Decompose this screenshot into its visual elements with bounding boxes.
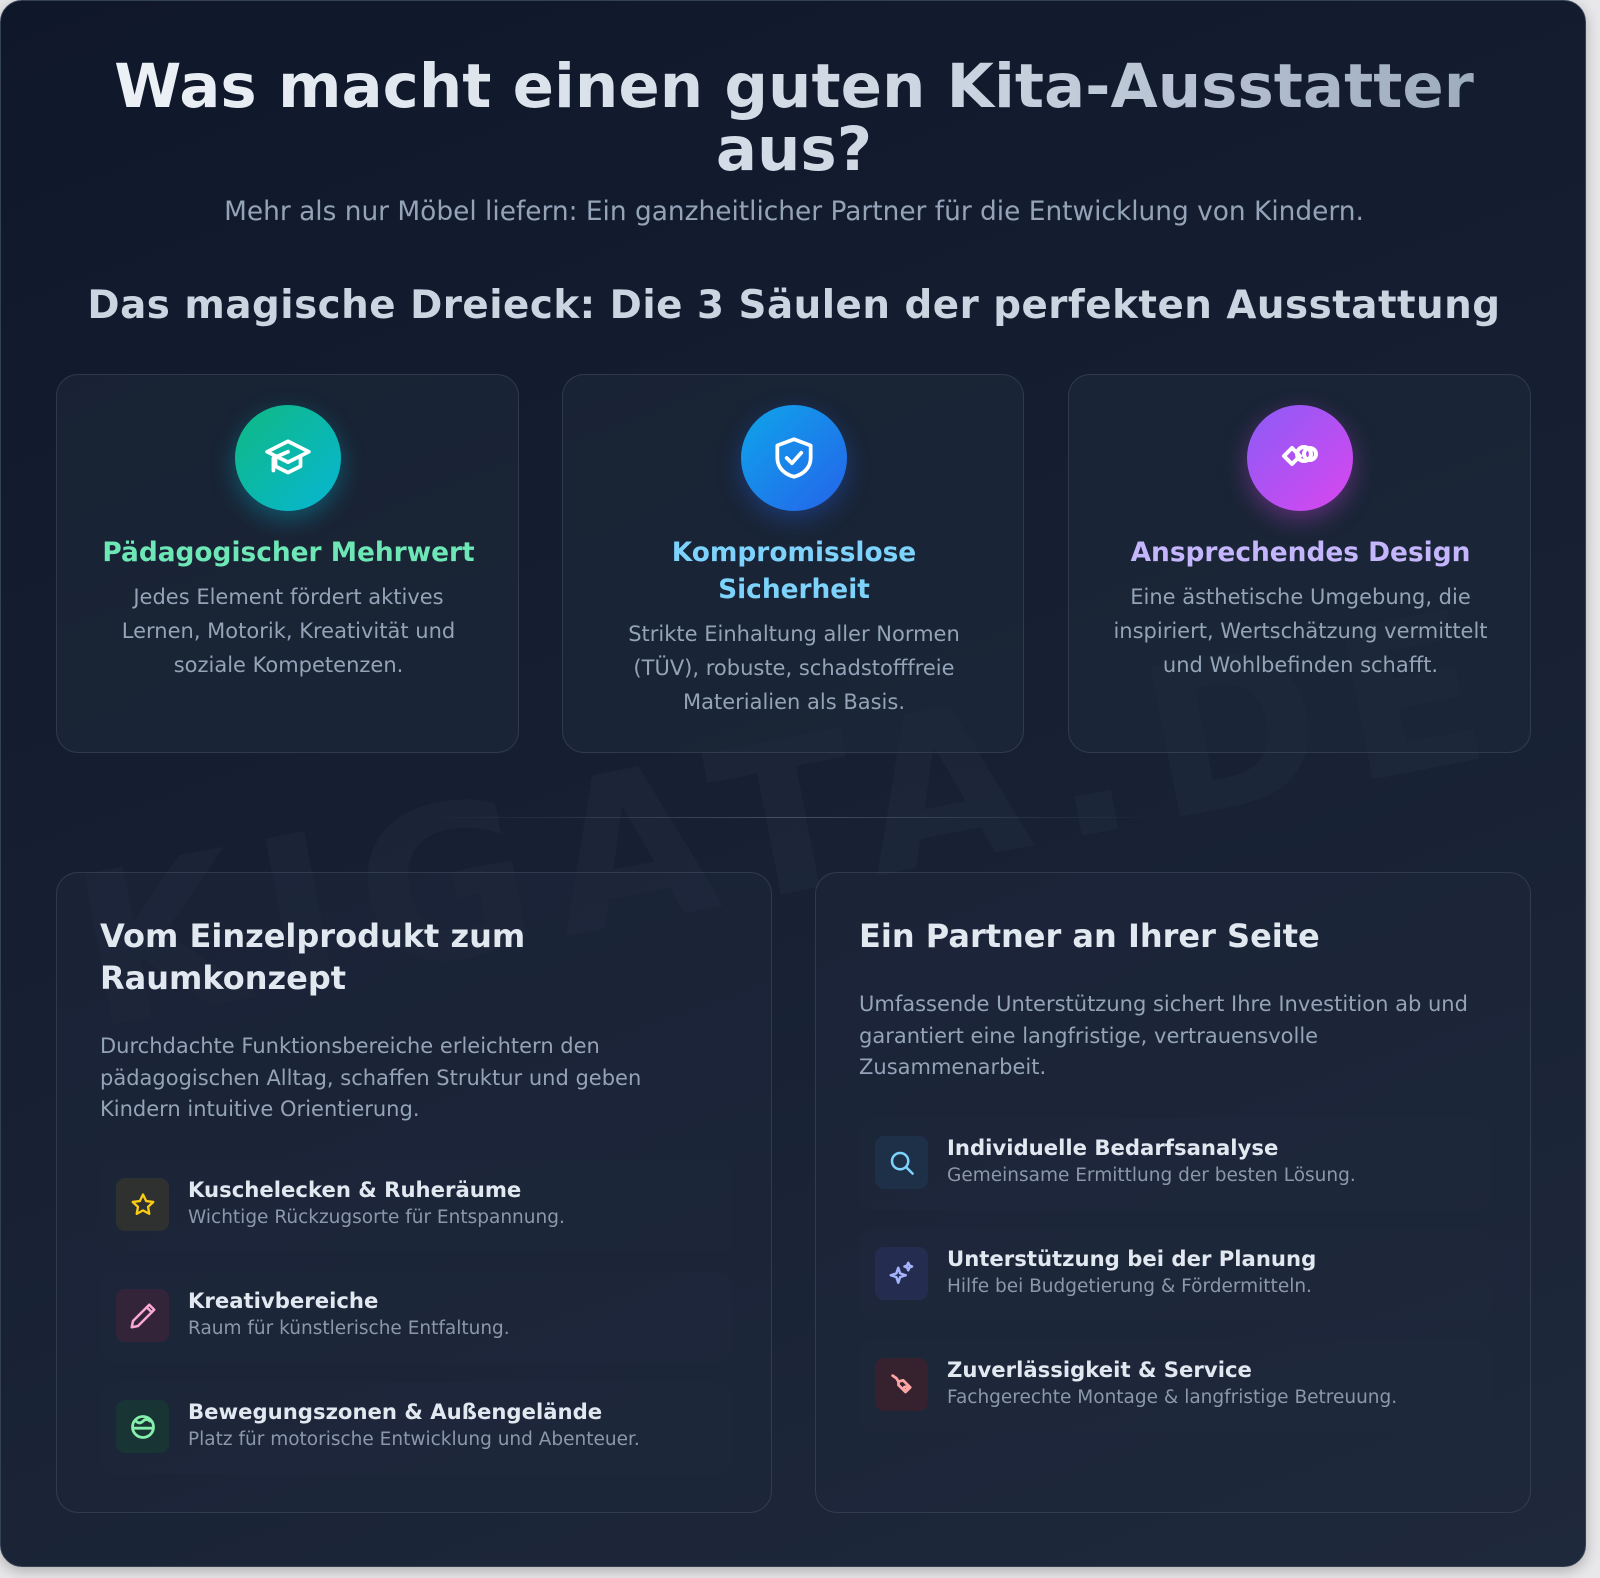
panel heading: Ein Partner an Ihrer Seite: [859, 917, 1320, 955]
item: Kuschelecken: Wichtige Rückzugsorte für Entspannung.: [188, 1207, 565, 1228]
card title: Ansprechendes Design: [1131, 537, 1470, 568]
panel text: Durchdachte Funktionsbereiche erleichtern den pädagogischen Alltag, schaffen Struktur und geben Kindern intuitive Orientierung.: [100, 1034, 641, 1121]
item: Planung: [859, 1229, 1491, 1321]
icon: pencil: [116, 1289, 169, 1342]
item: Service: Zuverlässigkeit & Service: [947, 1357, 1252, 1382]
panel heading: [100, 917, 525, 997]
item: Planung: Unterstützung bei der Planung: [947, 1246, 1316, 1271]
card title: Pädagogischer Mehrwert: [102, 537, 475, 568]
card text: Strikte Einhaltung aller Normen (TÜV), robuste, schadstofffreie Materialien als Basis.: [628, 622, 960, 714]
item: Service: [859, 1340, 1491, 1432]
watermark: KIGATA.DE: [57, 560, 1526, 1077]
panel: Partner: [815, 872, 1531, 1513]
item: Kreativbereiche: Kreativbereiche: [188, 1288, 378, 1313]
panel: Design: [1068, 374, 1531, 753]
item: Kreativbereiche: Raum für künstlerische Entfaltung.: [188, 1318, 510, 1339]
panel: Sicherheit: [562, 374, 1024, 753]
icon: shield: [741, 405, 847, 511]
icon: star: [116, 1178, 169, 1231]
item: Bedarfsanalyse: Individuelle Bedarfsanalyse: [947, 1135, 1278, 1160]
item: Bewegungszonen: [100, 1382, 732, 1474]
item: Planung: Hilfe bei Budgetierung & Fördermitteln.: [947, 1276, 1312, 1297]
icon: search: [875, 1136, 928, 1189]
item: Bedarfsanalyse: [859, 1118, 1491, 1210]
panel heading: Raumkonzept: [100, 959, 346, 997]
item: Service: Fachgerechte Montage & langfristige Betreuung.: [947, 1387, 1397, 1408]
card text: Jedes Element fördert aktives Lernen, Motorik, Kreativität und soziale Kompetenzen.: [122, 585, 455, 677]
item: Kuschelecken: Kuschelecken & Ruheräume: [188, 1177, 521, 1202]
card title: Sicherheit: [718, 574, 870, 605]
section heading: Das magische Dreieck: Die 3 Säulen der perfekten Ausstattung: [87, 283, 1501, 328]
item: Bewegungszonen: Platz für motorische Entwicklung und Abenteuer.: [188, 1429, 640, 1450]
title: aus?: [716, 114, 872, 185]
item: Kuschelecken: [100, 1160, 732, 1252]
card title: [672, 537, 916, 605]
item: Bewegungszonen: Bewegungszonen & Außengelände: [188, 1399, 602, 1424]
card title: Kompromisslose: [672, 537, 916, 568]
title: Was macht einen guten Kita-Ausstatter: [114, 51, 1474, 122]
panel: Raumkonzept: [56, 872, 772, 1513]
subtitle: Mehr als nur Möbel liefern: Ein ganzheitlicher Partner für die Entwicklung von Kindern.: [224, 196, 1364, 227]
item: Kreativbereiche: [100, 1271, 732, 1363]
panel text: Umfassende Unterstützung sichert Ihre Investition ab und garantiert eine langfristige, vertrauensvolle Zusammenarbeit.: [859, 992, 1468, 1079]
panel: pädagogischer Mehrwert: [56, 374, 519, 753]
panel heading: Vom Einzelprodukt zum: [100, 917, 525, 955]
icon: graduation cap: [235, 405, 341, 511]
icon: ball: [116, 1400, 169, 1453]
card text: Eine ästhetische Umgebung, die inspiriert, Wertschätzung vermittelt und Wohlbefinden schafft.: [1113, 585, 1488, 677]
icon: sparkles: [875, 1247, 928, 1300]
icon: tool: [875, 1358, 928, 1411]
title: [1, 55, 1587, 181]
icon: gem: [1247, 405, 1353, 511]
item: Bedarfsanalyse: Gemeinsame Ermittlung der besten Lösung.: [947, 1165, 1356, 1186]
